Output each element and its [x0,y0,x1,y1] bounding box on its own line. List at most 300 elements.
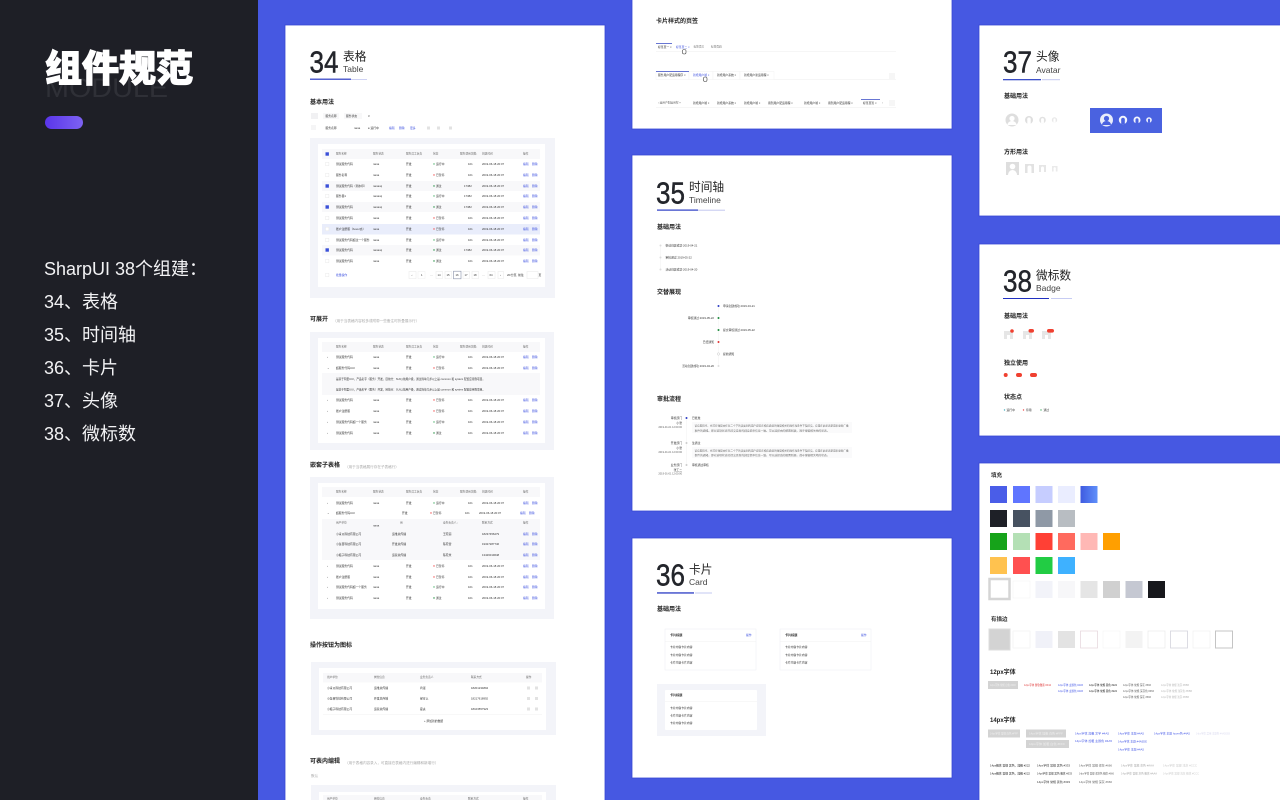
timeline: approval: 2019-01-01 12:00:00 [658,450,683,454]
table: expandable: 101 [468,431,473,435]
table: basic: 编辑 [523,227,529,231]
table: expandable: 服务调用次数↓ [460,344,477,348]
heading: 35 timeline: 35 [656,176,685,210]
filter controls: 删除 [399,126,405,130]
heading: 34 table: Table [343,64,364,74]
table: nested: 删除 [532,585,538,589]
table: expandable: 删除 [532,431,538,435]
table: basic: 开发 [406,238,412,242]
table: basic: 运行中 [436,194,445,198]
type samples: 14px: 14px字体 常规 灰色 粗体 #AAA [1121,772,1157,776]
table: nested: 小青瓜科技有限公司 [336,532,361,536]
type samples: 14px: 14px字体 主题 #4A5 [1118,732,1144,736]
table: icon actions: 小瓶子科技有限公司 [327,707,352,711]
table: icon actions: 18103557923 [471,707,489,711]
table: nested: › [327,501,328,505]
table: basic: 101 [468,162,473,166]
table: nested: 小瓶子科技有限公司 [336,553,361,557]
section: nested table: 嵌套子表格 [310,461,340,469]
table: expandable: 服务状态 [373,344,384,348]
table: nested: nana [373,585,380,589]
table: nested: 陈晓蕾 [443,542,452,546]
table: nested: 账户注册服 [336,575,350,579]
table: nested: 操作 [523,520,529,524]
section: alternating: 交替展现 [657,288,681,296]
table: basic: 17382 [464,248,472,252]
card: bordered [780,629,871,670]
table: nested: 用户单位 [336,520,347,524]
type samples: 12px: 12px字体 常规 白色 #FFF [990,683,1016,687]
panel: table [285,25,605,800]
table: basic: nana [373,162,380,166]
table: icon actions: 岗位信息 [374,675,385,679]
heading: 35 timeline: 时间轴 [689,180,724,194]
table: expandable: ⌄ [327,366,329,370]
pagination: 18 [474,273,477,277]
table: nested: 王晓丽 [443,532,452,536]
table: expandable: 开发 [406,398,412,402]
table: basic: 通过 [436,205,442,209]
type samples: 14px: 14px字体 加粗 白色 #FFF [1029,742,1065,746]
component list: 35、时间轴 [44,325,136,345]
heading: 38 badge: 38 [1003,264,1032,298]
table: nested: 18237456279 [482,532,500,536]
table: nested: 开发总传播 [392,542,406,546]
table: expandable: 运行中 [436,355,445,359]
table: nested: 已暂停 [433,511,442,515]
table: basic: 删除 [532,173,538,177]
table: basic: 删除 [532,205,538,209]
timeline: alternating: 活动创建成功 2019-04-20 [682,364,714,368]
table: nested: 运维总传播 [392,532,406,536]
timeline: alternating: 申请创建成功 2019-04-21 [723,304,755,308]
table: nested: 2019-06-18 20:07 [479,511,502,515]
table: expandable: 编辑 [523,431,529,435]
tabs row 1: 标签页四 [711,44,722,48]
timeline: alternating: 提前通知 [723,352,734,356]
timeline: approval: 业务部门 [671,463,682,467]
heading: 35 timeline: Timeline [689,195,721,205]
table: expandable: 是基于阿里UUI，产品名字（服务）开发，目前分：SUI以前用户级，通过简单几步以上是 common 和 system 配置应用到项目。 [336,388,485,392]
table: nested: 状态 [433,490,439,494]
pagination: › [500,273,501,277]
table: expandable: 101 [468,420,473,424]
pagination: 16 [456,273,459,277]
pagination: 15 [446,273,450,277]
table: nested: 2019-06-18 20:07 [482,564,505,568]
table: basic: 通过 [436,248,442,252]
table: expandable: 删除 [532,409,538,413]
component list: 34、表格 [44,292,118,312]
type samples: 14px: 14px字体 常规 深灰 #666 [1079,780,1112,784]
section: standalone: 独立使用 [1004,359,1028,367]
table: basic: nana [373,259,380,263]
table: nested: 101 [468,575,473,579]
table: expandable [310,332,554,450]
tabs row 3 [656,99,896,108]
table: basic: 操作 [523,152,529,156]
swatches: fill [990,486,1165,599]
panel: badge [979,244,1280,436]
table: basic: 运行中 [436,238,445,242]
table: nested: 测试服务代码 [336,501,353,505]
tabs row 3: 用到用户配运用程 × [828,101,853,105]
table: basic: 2019-06-18 20:07 [482,194,505,198]
table: basic: 删除 [532,194,538,198]
section: expandable [310,316,419,323]
heading: 37 avatar: 37 [1003,44,1032,80]
table: basic: 服务名称 [336,152,347,156]
timeline: approval: 小张 [676,446,682,450]
table: icon actions: 小青瓜科技有限公司 [327,686,352,690]
table: icon actions: 联系方式 [471,675,482,679]
table: nested: 服务调用次数↓ [460,490,477,494]
table: basic: 测试服务代码 [336,248,353,252]
table: basic: 2019-06-18 20:07 [482,173,505,177]
table: expandable: 已暂停 [436,409,445,413]
table: nested: 删除 [532,501,538,505]
section: square usage: 方形用法 [1004,148,1028,156]
table: expandable: nana [373,409,380,413]
timeline: approval: 该应用程序、也可在弹窗中任务二个下的该类别的用户提前在相应通道的弹窗相关的操作和条件下及提交。应用在此状态是用来更新广播 [694,448,849,452]
section: basic usage: 基础用法 [657,223,681,231]
table: basic: 服务名称 [336,173,347,177]
table: expandable: 2019-06-18 20:07 [482,420,505,424]
table: basic: 测试服务代码 [336,259,353,263]
swatches: bordered [989,629,1232,650]
table: basic: 编辑 [523,216,529,220]
table: nested: 开发 [402,511,408,515]
table: nested: 编辑 [523,532,529,536]
type samples: 14px: 14px字体 加粗 文字 #4A5 [1075,732,1109,736]
panel: avatar [979,25,1280,216]
table: expandable: › [327,420,328,424]
type samples: 14px [988,730,1230,784]
type samples: 14px: 14px字体 常规 灰色 #AAA [1121,764,1154,768]
table: expandable: 删除 [532,355,538,359]
table: nested: 开发 [406,564,412,568]
table: expandable: 删除 [532,366,538,370]
ghost subtitle: MODULE [45,73,168,103]
type samples: 14px: 14px字体 主题 hover色 #4A5 [1154,732,1190,736]
type samples: 12px: 12px字体 常规 浅灰色 #BBB [1161,689,1192,693]
table: nested: 用 [400,520,403,524]
timeline: approval [658,416,852,476]
table: expandable: nana [373,420,380,424]
table: nested: 已暂停 [436,575,445,579]
pagination: … [430,273,433,277]
table: expandable: 开发 [406,431,412,435]
card: bordered: 卡片标题 [785,632,798,637]
table: basic: 编辑 [523,205,529,209]
table: icon actions: 运维总传播 [374,686,388,690]
table: expandable: 测试服务代码 [336,355,353,359]
table: basic: nanaxq [373,248,383,252]
type samples: 14px: 14px字体 加粗 白色 #FFF [1029,732,1063,736]
table: expandable: 删除 [532,398,538,402]
table: nested: 编辑 [523,596,529,600]
type samples: 14px: 14px字体 常规 深灰 #666 [1079,764,1112,768]
table: expandable: 开发 [406,409,412,413]
table: nested: nana [373,564,380,568]
card: with link: 卡片内容卡片内容 [670,645,693,649]
table: basic: 2019-06-18 20:07 [482,259,505,263]
table: basic: nanaxq [373,205,383,209]
table: nested: 测试服务代码 [336,564,353,568]
tabs row 2: 新增用户系统 × [717,73,737,77]
timeline: basic: 审核通过 2019-05-22 [666,256,692,260]
table: basic: 开发 [406,248,412,252]
panel: timeline [632,155,952,511]
heading: 38 badge [1003,264,1072,299]
timeline: alternating: 提交审核通过 2019-05-22 [723,328,755,332]
table: nested: 陈晓米 [443,553,452,557]
timeline: alternating: 审核通过 2019-05-22 [688,316,714,320]
table: nested: 联系方式 [482,520,493,524]
table: nested: 删除 [529,511,535,515]
table: nested: 开发 [406,575,412,579]
timeline: alternating [682,304,755,368]
tabs row 3: 新增用户端 × [804,101,821,105]
type samples: 12px: 12px字体 常规 黑色 #222 [1089,683,1117,687]
table: basic: 2019-06-18 20:07 [482,216,505,220]
table: nested: 测试服务代码超一个服务 [336,585,367,589]
table: nested: 编辑 [520,511,526,515]
card: with link: 操作 [746,633,752,637]
filter controls [311,113,452,130]
table: nested: 开发 [406,585,412,589]
tabs row 3: › [882,100,883,104]
avatars: square [1006,162,1058,175]
type samples: 12px: 12px字体 常规 深灰 #666 [1123,683,1151,687]
type samples: 14px: 14px字体 主题 #4A5DE [1118,740,1147,744]
table: nested: 101 [468,585,473,589]
sidebar [0,0,258,800]
timeline: approval: 该应用程序、也可在弹窗中任务二个下的该类别的用户提前在相应通道的弹窗相关的操作和条件下及提交。应用在此状态是用来更新广播 [694,424,849,428]
table: basic: 开发 [406,194,412,198]
filter controls: 服务状态 [346,114,357,118]
table: basic: 测试服务代码 [336,162,353,166]
table: basic: 编辑 [523,184,529,188]
tabs row 1: 标签页二 × [676,45,690,49]
heading: fill: 填充 [991,471,1003,479]
accent pill [45,116,83,129]
table: expandable: 2019-06-18 20:07 [482,366,505,370]
component list: SharpUI 38个组建： [44,259,207,279]
table: basic: 服务员工负责 [406,152,422,156]
card: on gray background: 卡片内容卡片内容 [670,721,693,725]
timeline: basic: 申请创建成功 2019-04-21 [666,244,698,248]
table: expandable: › [327,398,328,402]
table: expandable: 通过 [436,431,442,435]
table: icon actions: 小鱼苗科技有限公司 [327,696,352,700]
tabs row 1 [656,43,896,52]
table: nested: 2019-06-18 20:07 [482,585,505,589]
pagination: … [482,273,485,277]
table: basic: nanaxq [373,184,383,188]
timeline: approval: 2019-01-01 12:00:00 [658,425,683,429]
card: bordered: 操作 [861,633,867,637]
card: on gray background [657,684,766,736]
table: nested: 删除 [532,564,538,568]
status dots: 运行中 [1006,408,1015,412]
pagination: 17 [464,273,468,277]
table: basic: 删除 [532,227,538,231]
badges on icons [1004,329,1054,339]
table: nested: 2019-06-18 20:07 [482,596,505,600]
status dots: 停用 [1026,408,1032,412]
tabs row 3: 新增用户系统 × [717,101,737,105]
table: icon actions: + 添加新的数据 [424,719,443,723]
table: nested: 已暂停 [436,564,445,568]
timeline: approval: 开发部门 [671,441,682,445]
type samples: 14px: 14px字体 加粗 主题色 #4A5 [1075,739,1112,743]
section: inline editing: 可表内编辑 [310,757,340,765]
table: expandable: 101 [468,409,473,413]
table: nested: nana [373,501,380,505]
table: basic: 删除 [532,238,538,242]
table: nested: 编辑 [523,542,529,546]
timeline: alternating: 已经通知 [703,340,714,344]
type samples: 12px: 12px字体 常规 深灰 #666 [1123,695,1151,699]
timeline: basic: 活动创建成功 2019-04-20 [666,268,698,272]
table: nested: 删除 [532,596,538,600]
heading: 36 card: Card [689,577,708,587]
table: expandable: 2019-06-18 20:07 [482,431,505,435]
table: expandable: 账户注册服 [336,409,350,413]
table: expandable: 开发 [406,420,412,424]
table: expandable: 101 [468,355,473,359]
tabs row 3: ‹ 运用户配运用程 × [658,100,681,104]
table: nested: 运行中 [436,585,445,589]
panel: tabs [632,0,952,129]
table: inline editing [311,785,556,800]
heading: 34 table [310,44,367,80]
tabs row 1: 标签页一 × [658,45,672,49]
heading: bordered: 有描边 [991,615,1008,623]
table: basic: 已暂停 [436,227,445,231]
type samples: 12px: 12px字体 常规 浅灰 #BBB [1161,683,1189,687]
section: expandable: 可展开 [310,316,328,323]
table: basic: 2019-06-18 20:07 [482,248,505,252]
table: nested: nana [373,575,380,579]
table: basic: 编辑 [523,173,529,177]
tabs row 2: 服务用户配运用程序 × [658,73,686,77]
table: nested: › [327,564,328,568]
table: nested: 删除 [532,553,538,557]
table: nested: › [327,575,328,579]
table: expandable: 编辑 [523,398,529,402]
type samples: 12px: 12px字体 主题色 #4A5 [1058,683,1083,687]
pagination: 批量操作 [336,273,347,277]
table: basic: nana [373,238,380,242]
table: basic: 已暂停 [436,173,445,177]
table: nested: 运行中 [436,501,445,505]
table: basic: 101 [468,216,473,220]
table: expandable: 测试服务代码 [336,431,353,435]
card: with link: 卡片标题 [670,632,683,637]
pagination: 20/分页, 前往 [507,273,524,277]
table: basic: 2019-06-18 20:07 [482,184,505,188]
table: expandable: 编辑 [523,366,529,370]
table: expandable: nana [373,431,380,435]
heading: 37 avatar [1003,44,1061,80]
table: expandable: 编辑 [523,409,529,413]
table: basic: 已暂停 [436,216,445,220]
table: nested: 开发 [406,501,412,505]
table: basic: nana [373,173,380,177]
pagination [326,271,542,279]
table: expandable: nana [373,398,380,402]
table: expandable: 已暂停 [436,398,445,402]
table: nested: nana [373,524,380,528]
table: nested: › [327,596,328,600]
table: basic: nana [373,216,380,220]
heading: 34 table: 表格 [343,50,367,64]
table: icon actions: 用户单位 [327,675,338,679]
heading: 38 badge: Badge [1036,283,1061,293]
table: nested: 编辑 [523,585,529,589]
table: expandable: 开发 [406,366,412,370]
table: basic: 开发 [406,173,412,177]
table: expandable: 编辑 [523,355,529,359]
panel: card [632,538,952,778]
table: nested: 101 [468,501,473,505]
table: basic: 删除 [532,184,538,188]
pagination: 页 [538,273,542,277]
table: icon actions: 开发总传播 [374,696,388,700]
table: expandable: 测试服务代码 [336,398,353,402]
type samples: 14px: 14px字体 常规 黑色 #333 [1037,764,1070,768]
table: nested: 编辑 [523,501,529,505]
section: approval flow: 审批流程 [657,395,681,403]
timeline: approval: 张工二 [674,468,682,472]
table: expandable: 测试服务代码超一个服务 [336,420,367,424]
table: basic: 测试服务代码 [336,216,353,220]
section: icon actions: 操作按钮为图标 [310,641,352,649]
table: basic: 开发 [406,205,412,209]
table: nested [310,477,554,619]
timeline: approval: 生通过 [692,441,701,445]
heading: 14px type: 14px字体 [990,716,1016,724]
heading: 34 table: 34 [310,44,338,80]
section: basic usage: 基础用法 [1004,312,1028,320]
table: basic: 2019-06-18 20:07 [482,238,505,242]
table: basic: 开发 [406,259,412,263]
type samples: 12px: 12px字体 主题色 #4A5 [1058,689,1083,693]
table: expandable: 101 [468,398,473,402]
table: nested: nana [373,596,380,600]
table: basic [310,138,555,298]
table: basic: 17382 [464,194,472,198]
section: inline editing [310,757,438,765]
table: basic: 通过 [436,259,442,263]
table: basic: 创建时间 [482,152,493,156]
table: basic: 删除 [532,162,538,166]
table: basic: 服务状态 [373,152,384,156]
table: expandable: › [327,355,328,359]
table: nested: 业务负责人↓ [443,520,458,524]
component list [44,259,207,444]
heading: 37 avatar: Avatar [1036,65,1061,75]
label: default: 默认 [311,773,319,778]
table: icon actions: 鸡蛋 [420,686,426,690]
pagination: 64 [490,273,493,277]
table: nested: 测试服务代码 [336,596,353,600]
timeline: approval: 审核部门 [671,416,682,420]
table: nested: › [327,585,328,589]
table: nested: ⌄ [327,511,329,515]
